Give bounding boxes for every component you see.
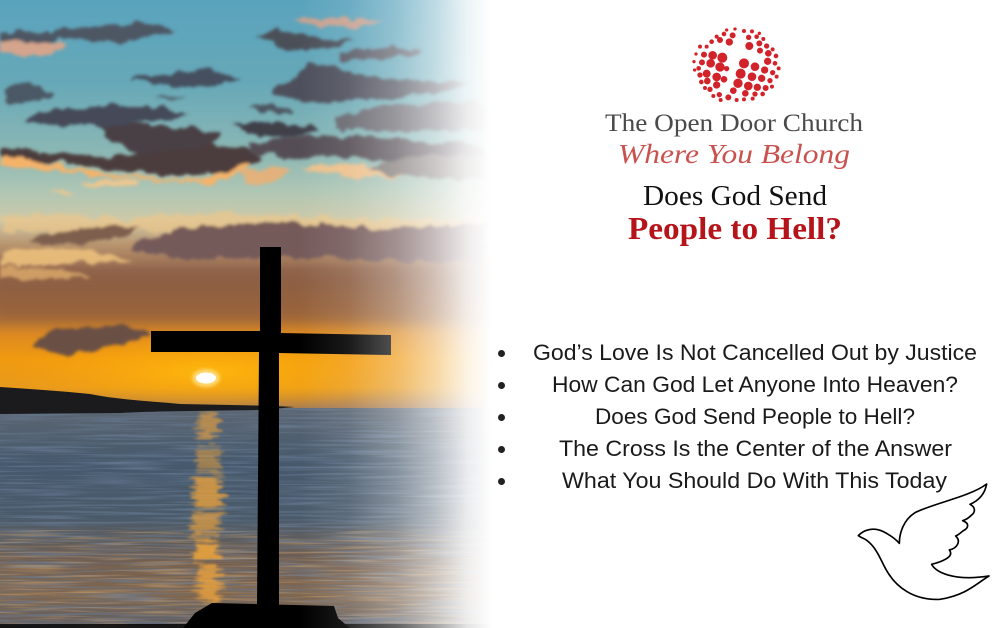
sun reflection: [192, 412, 222, 600]
church name: The Open Door Church: [605, 110, 864, 137]
clouds: upper sky: [0, 18, 486, 192]
sun: [192, 369, 220, 387]
church tagline: Where You Belong: [618, 139, 850, 169]
church logo: red dotted globe with cross: [693, 28, 780, 101]
photo: sunset with cross over the sea: [0, 0, 500, 628]
clouds: lower sky: [0, 272, 500, 324]
horizon glow: [6, 330, 406, 414]
sea: [0, 408, 492, 628]
sky: [0, 0, 492, 408]
dark cloud near the sun: [32, 326, 150, 353]
white fade toward the right: [300, 0, 492, 628]
bullet 5: What You Should Do With This Today: [562, 468, 947, 493]
bullet 1: God’s Love Is Not Cancelled Out by Justice: [533, 340, 977, 365]
white right panel: [491, 0, 1000, 628]
bullet 2: How Can God Let Anyone Into Heaven?: [552, 372, 958, 397]
bullet list: [498, 340, 977, 493]
heading line 1: Does God Send: [643, 181, 827, 212]
cross silhouette: [0, 247, 492, 628]
water ripples: [0, 408, 492, 628]
warm water ripples: [0, 530, 492, 628]
icon: dove outline: [858, 484, 989, 599]
distant headland: [0, 387, 295, 414]
heading line 2: People to Hell?: [628, 210, 842, 246]
bullet 4: The Cross Is the Center of the Answer: [559, 436, 952, 461]
bullet 3: Does God Send People to Hell?: [595, 404, 915, 429]
